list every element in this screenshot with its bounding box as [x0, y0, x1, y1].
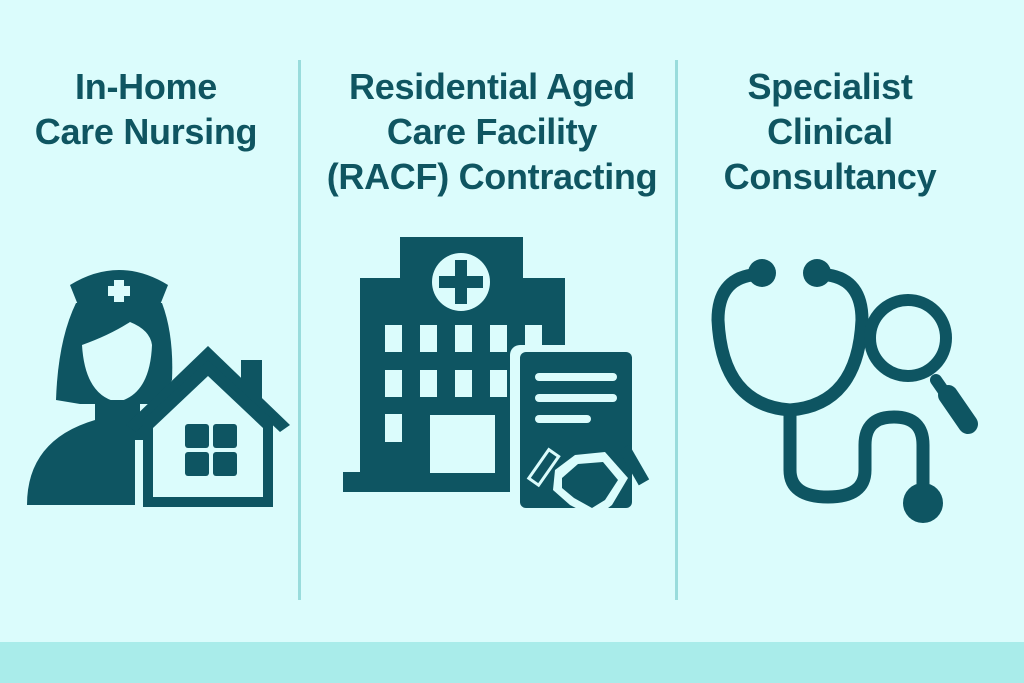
- heading: in-home care nursing: Care Nursing: [35, 111, 257, 152]
- heading: RACF contracting: (RACF) Contracting: [327, 156, 657, 197]
- icon: hospital building with contract and handshake: [343, 237, 649, 520]
- icon: stethoscope with magnifier: [718, 275, 968, 497]
- icon: nurse with house: [27, 270, 290, 507]
- heading: specialist clinical consultancy: Specialist: [747, 66, 913, 107]
- heading: specialist clinical consultancy: Clinical: [767, 111, 893, 152]
- heading: in-home care nursing: [35, 66, 257, 152]
- heading: RACF contracting: Residential Aged: [349, 66, 635, 107]
- bottom band: [0, 642, 1024, 683]
- heading: RACF contracting: Care Facility: [387, 111, 597, 152]
- heading: specialist clinical consultancy: Consultancy: [724, 156, 936, 197]
- heading: RACF contracting: [327, 66, 657, 197]
- heading: in-home care nursing: In-Home: [75, 66, 217, 107]
- heading: specialist clinical consultancy: [724, 66, 936, 197]
